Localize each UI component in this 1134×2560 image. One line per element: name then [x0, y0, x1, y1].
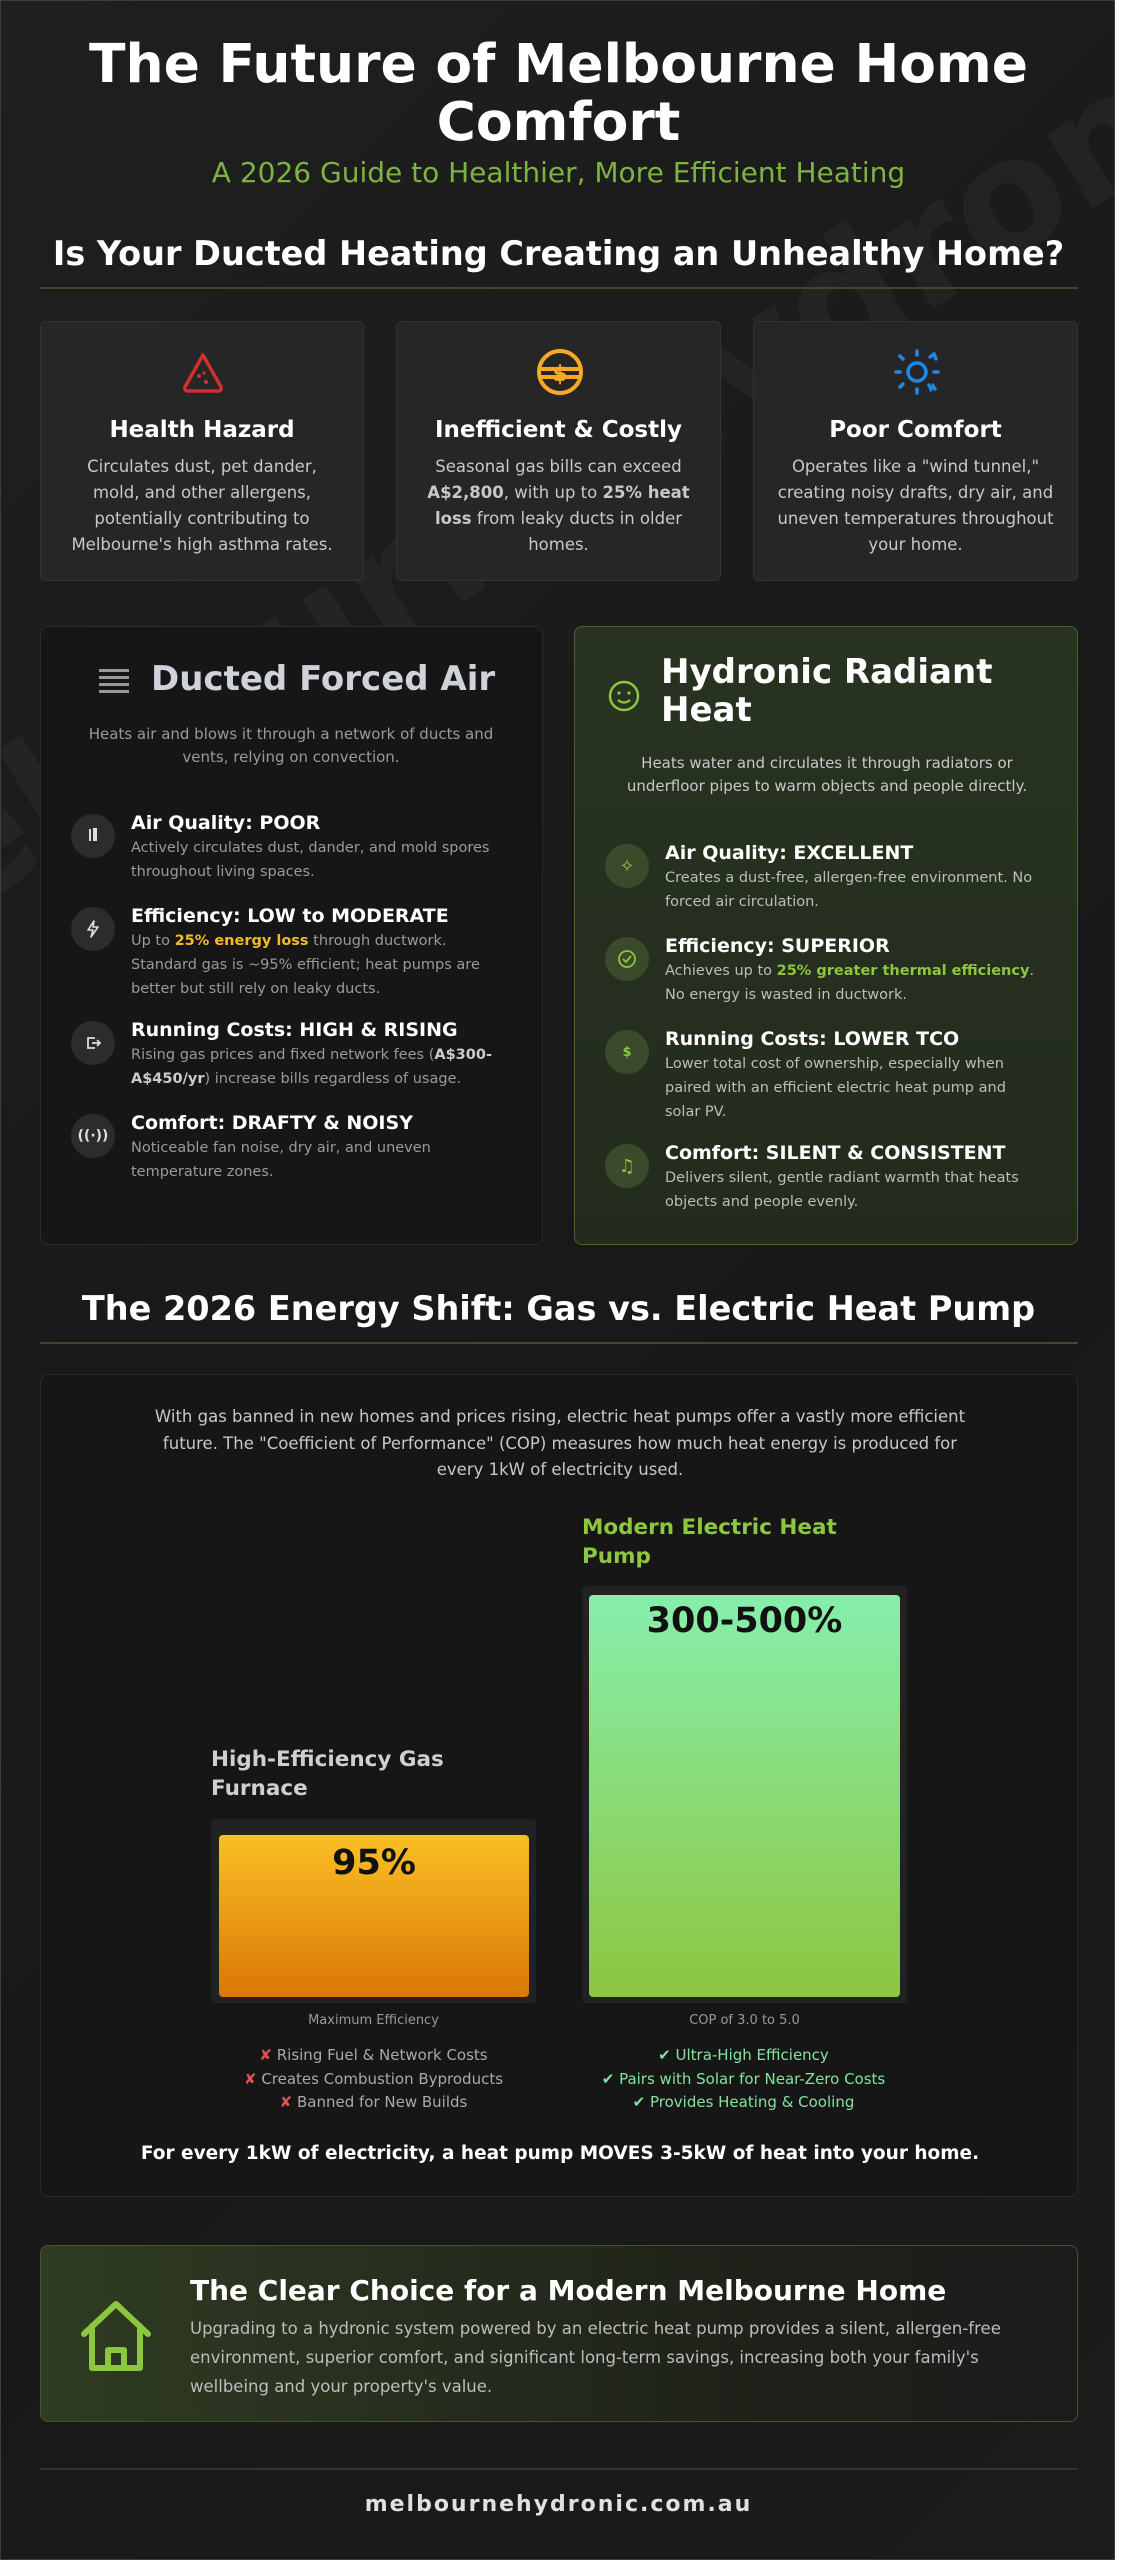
item: air quality: Actively circulates dust, dander, and mold spores throughout living spaces.	[131, 840, 489, 880]
intro text: With gas banned in new homes and prices rising, electric heat pumps offer a vastly more efficient future. The "Coefficient of Performance" (COP) measures how much heat energy is produced for every 1kW of electricity used.	[155, 1407, 965, 1479]
heading: unhealthy home: Is Your Ducted Heating Creating an Unhealthy Home?	[53, 234, 1064, 273]
item: air quality: Creates a dust-free, allergen-free environment. No forced air circulation.	[665, 870, 1032, 910]
list: heat pump pros: ✔ Pairs with Solar for Near-Zero Costs	[602, 2070, 885, 2088]
bar: gas furnace	[211, 1747, 536, 2003]
list: heat pump pros	[602, 2046, 885, 2111]
header: hydronic	[608, 652, 992, 730]
card text: Seasonal gas bills can exceed A$2,800, with up to 25% heat loss from leaky ducts in older homes.	[427, 457, 690, 554]
card title: Poor Comfort	[829, 417, 1002, 443]
icon: coin	[537, 349, 583, 395]
item: comfort: Delivers silent, gentle radiant warmth that heats objects and people evenly.	[665, 1170, 1019, 1210]
icon: sun/air	[894, 349, 940, 395]
item: running costs: Lower total cost of ownership, especially when paired with an efficient electric heat pump and solar PV.	[665, 1056, 1006, 1120]
item: efficiency: Efficiency: LOW to MODERATE	[131, 905, 449, 927]
desc: Heats air and blows it through a network of ducts and vents, relying on convection.	[89, 725, 493, 766]
title: Comfort	[437, 90, 680, 153]
item: running costs	[605, 1028, 1006, 1120]
panel: clear choice CTA	[40, 2245, 1078, 2422]
item: comfort: Comfort: SILENT & CONSISTENT	[665, 1142, 1006, 1164]
card text: Operates like a "wind tunnel," creating noisy drafts, dry air, and uneven temperatures throughout your home.	[777, 457, 1054, 554]
footer url: melbournehydronic.com.au	[365, 2492, 752, 2517]
item: efficiency: Efficiency: SUPERIOR	[665, 935, 890, 957]
item: running costs: Running Costs: HIGH & RISING	[131, 1019, 458, 1041]
header: ducted: Ducted Forced Air	[151, 659, 495, 699]
item: running costs: Rising gas prices and fixed network fees (A$300-A$450/yr) increase bills regardless of usage.	[131, 1047, 492, 1087]
CTA title: The Clear Choice for a Modern Melbourne Home	[190, 2274, 946, 2307]
icon: coin: $	[552, 362, 568, 387]
item: running costs: $	[622, 1044, 632, 1060]
panel: hydronic radiant heat	[574, 626, 1078, 1245]
icon: hazard	[183, 353, 223, 393]
panel: inefficient	[396, 321, 721, 581]
item: air quality: ✧	[619, 856, 635, 876]
item: efficiency	[605, 935, 1034, 1003]
item: efficiency: Up to 25% energy loss through ductwork. Standard gas is ~95% efficient; heat pumps are better but still rely on leaky ducts.	[131, 933, 480, 997]
list: gas cons	[244, 2046, 503, 2111]
bar: heat pump: 300-500%	[647, 1601, 842, 1641]
list: gas cons: ✘ Creates Combustion Byproducts	[244, 2070, 503, 2088]
card title: Health Hazard	[109, 417, 295, 443]
item: efficiency: Achieves up to 25% greater thermal efficiency. No energy is wasted in ductwork.	[665, 963, 1034, 1003]
bar: gas furnace: 95%	[332, 1843, 416, 1883]
bar: gas furnace: High-Efficiency Gas	[211, 1747, 444, 1772]
item: running costs: Running Costs: LOWER TCO	[665, 1028, 959, 1050]
panel: poor comfort	[753, 321, 1078, 581]
title: The Future of Melbourne Home	[89, 32, 1028, 95]
item: comfort	[605, 1142, 1019, 1210]
list: gas cons: ✘ Banned for New Builds	[280, 2093, 467, 2111]
header: hydronic: Hydronic Radiant	[661, 652, 992, 692]
item: air quality: Air Quality: POOR	[131, 812, 320, 834]
key takeaway: For every 1kW of electricity, a heat pump MOVES 3-5kW of heat into your home.	[141, 2143, 979, 2164]
subtitle: A 2026 Guide to Healthier, More Efficient Heating	[212, 156, 905, 189]
list: heat pump pros: ✔ Provides Heating & Cooling	[633, 2093, 854, 2111]
CTA text: Upgrading to a hydronic system powered by an electric heat pump provides a silent, allergen-free environment, superior comfort, and significant long-term savings, increasing both your family's wellbeing and your property's value.	[190, 2319, 1001, 2396]
item: comfort	[71, 1112, 431, 1180]
icon: smiley	[608, 680, 640, 712]
item: comfort: ((·))	[78, 1128, 108, 1144]
bar: heat pump: Pump	[582, 1544, 651, 1569]
item: comfort: Comfort: DRAFTY & NOISY	[131, 1112, 413, 1134]
item: air quality	[605, 842, 1032, 910]
list: heat pump pros: ✔ Ultra-High Efficiency	[658, 2046, 829, 2064]
title	[89, 32, 1028, 153]
header: hydronic: Heat	[661, 690, 752, 730]
card title: Inefficient & Costly	[435, 417, 682, 443]
caption: gas: Maximum Efficiency	[308, 2013, 439, 2028]
item: air quality: Air Quality: EXCELLENT	[665, 842, 913, 864]
item: running costs	[71, 1019, 492, 1087]
desc: Heats water and circulates it through radiators or underfloor pipes to warm objects and people directly.	[627, 754, 1027, 795]
bar: gas furnace: Furnace	[211, 1776, 308, 1801]
bar: heat pump	[582, 1515, 907, 2003]
panel: energy comparison	[40, 1374, 1078, 2197]
item: comfort: Noticeable fan noise, dry air, and uneven temperature zones.	[131, 1140, 431, 1180]
caption: heat pump: COP of 3.0 to 5.0	[689, 2013, 800, 2028]
bar: heat pump: Modern Electric Heat	[582, 1515, 837, 1540]
heading: energy shift: The 2026 Energy Shift: Gas vs. Electric Heat Pump	[82, 1289, 1035, 1328]
item: comfort: ♫	[619, 1156, 635, 1176]
item: efficiency	[71, 905, 480, 997]
list: gas cons: ✘ Rising Fuel & Network Costs	[259, 2046, 488, 2064]
icon: vent lines	[99, 669, 129, 693]
item: air quality	[71, 812, 489, 880]
panel: ducted forced air	[40, 626, 543, 1245]
card text: Circulates dust, pet dander, mold, and other allergens, potentially contributing to Melbourne's high asthma rates.	[71, 457, 333, 554]
icon: house	[81, 2301, 151, 2371]
panel: health hazard	[40, 321, 364, 581]
